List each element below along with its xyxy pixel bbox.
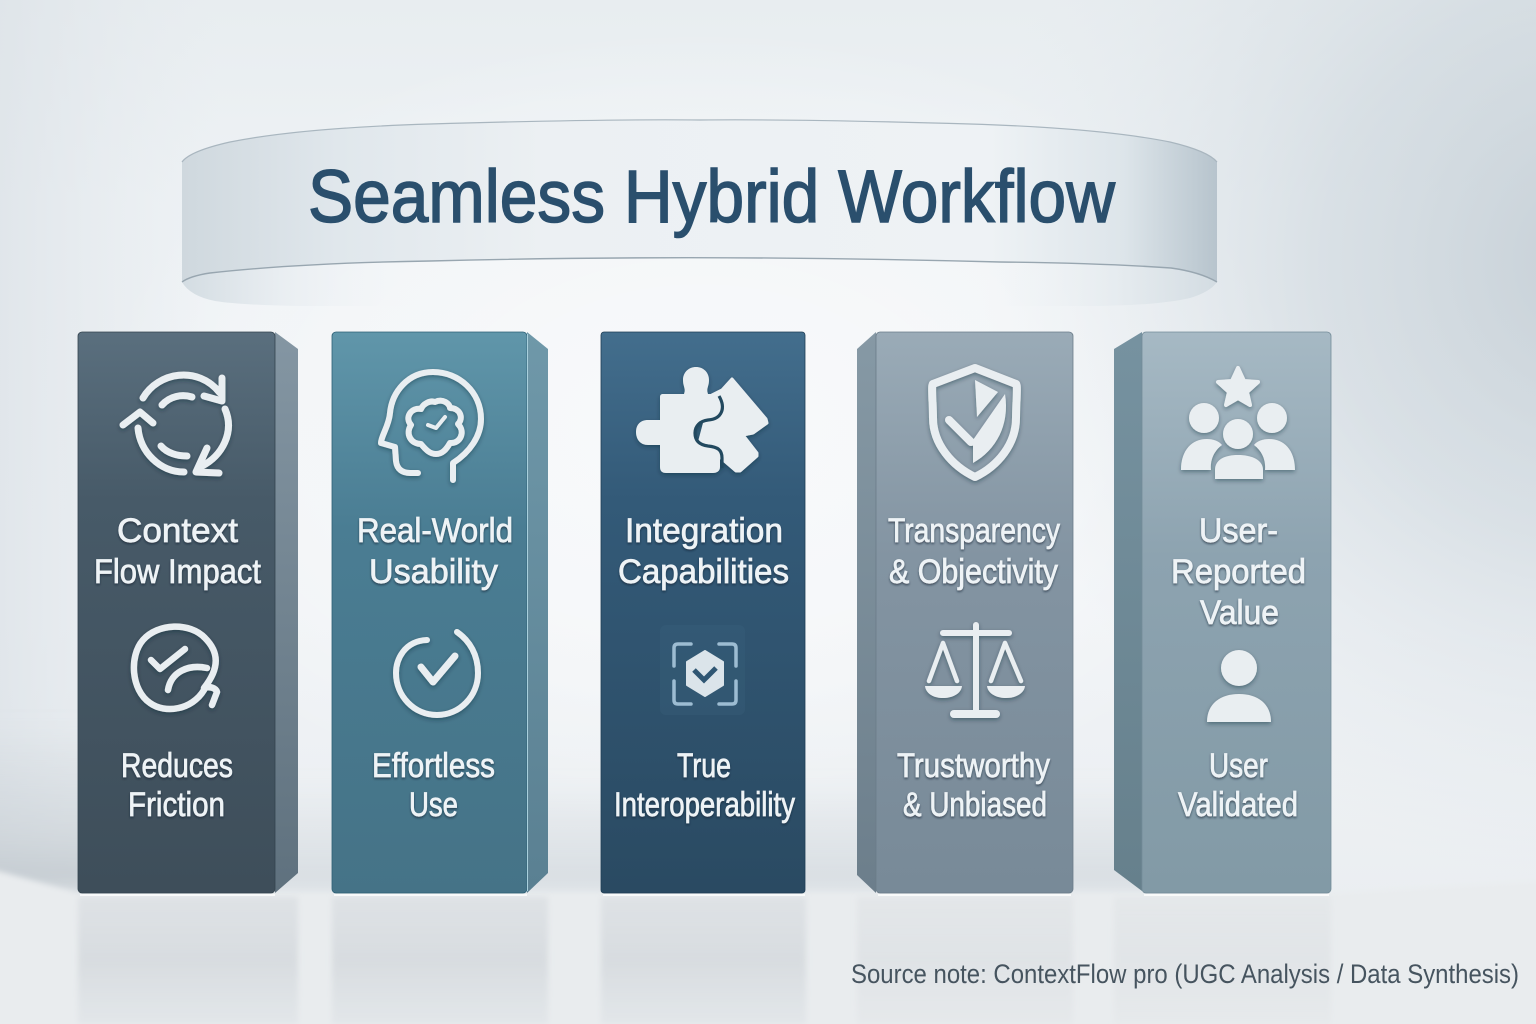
heading: integration capabilities: Integration — [625, 512, 783, 550]
icon: puzzle pieces — [636, 367, 767, 473]
icon: shield with check — [932, 368, 1017, 477]
heading: integration capabilities: Capabilities — [618, 553, 789, 591]
panel: transparency and objectivity — [857, 332, 1073, 895]
icon: hexagon check in brackets — [660, 625, 745, 715]
icon: reduces friction check — [134, 627, 217, 709]
heading: context flow impact: Flow Impact — [94, 553, 262, 591]
heading: real-world usability: Usability — [369, 553, 498, 591]
panel: context flow impact — [78, 332, 298, 895]
heading: transparency and objectivity: Transparency — [888, 512, 1060, 550]
label: trustworthy and unbiased: Trustworthy — [897, 747, 1050, 785]
label: trustworthy and unbiased: & Unbiased — [903, 786, 1047, 824]
panel: real-world usability — [332, 332, 548, 895]
title text: Seamless Hybrid Workflow — [308, 155, 1116, 238]
icon: head with flower check — [381, 372, 481, 480]
panel: user-reported value — [1114, 332, 1331, 895]
icon: star over three people — [1181, 368, 1295, 479]
heading: user-reported value: User- — [1199, 512, 1278, 550]
label: effortless use: Effortless — [372, 747, 495, 785]
label: reduces friction: Reduces — [121, 747, 233, 785]
heading: user-reported value: Value — [1200, 594, 1279, 632]
heading: real-world usability: Real-World — [357, 512, 513, 550]
label: effortless use — [372, 747, 495, 824]
heading: context flow impact — [94, 512, 262, 591]
label: reduces friction: Friction — [128, 786, 225, 824]
heading: user-reported value: Reported — [1171, 553, 1306, 591]
label: true interoperability: True — [677, 747, 731, 785]
heading: transparency and objectivity — [888, 512, 1060, 591]
label: trustworthy and unbiased — [897, 747, 1050, 824]
label: effortless use: Use — [409, 786, 458, 824]
heading: integration capabilities — [618, 512, 789, 591]
panel: integration capabilities — [601, 332, 805, 895]
icon: check in open circle — [396, 632, 478, 715]
title banner — [182, 120, 1217, 306]
label: reduces friction — [121, 747, 233, 824]
icon: cycle arrows — [123, 375, 228, 473]
icon: single user — [1207, 650, 1271, 722]
label: user validated: User — [1209, 747, 1268, 785]
label: true interoperability — [614, 747, 795, 824]
heading: user-reported value — [1171, 512, 1306, 632]
heading: transparency and objectivity: & Objectivity — [889, 553, 1058, 591]
heading: real-world usability — [357, 512, 513, 591]
label: user validated: Validated — [1178, 786, 1298, 824]
label: true interoperability: Interoperability — [614, 786, 795, 824]
label: user validated — [1178, 747, 1298, 824]
heading: context flow impact: Context — [117, 512, 239, 550]
icon: balance scales — [925, 625, 1025, 714]
